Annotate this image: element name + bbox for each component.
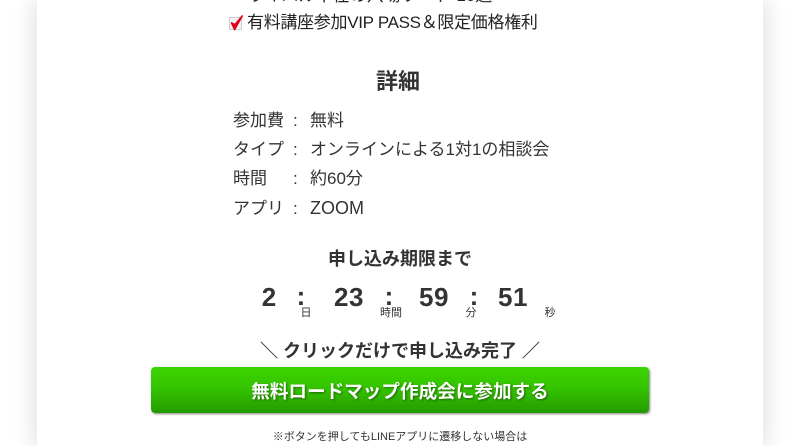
- countdown timer: 分: [466, 307, 476, 319]
- row: type: :: [293, 140, 298, 159]
- countdown timer: :: [385, 281, 393, 311]
- row: type: タイプ: [233, 140, 284, 159]
- button: join free roadmap session: [151, 367, 649, 413]
- row: fee: 無料: [310, 111, 344, 130]
- row: app: :: [293, 199, 298, 218]
- row: fee: :: [293, 111, 298, 130]
- details list: [233, 111, 549, 218]
- days: 2: [262, 282, 276, 312]
- row: time: 約60分: [310, 169, 363, 188]
- countdown timer: [262, 281, 556, 319]
- row: time: 時間: [233, 169, 267, 188]
- button: join free roadmap session: 無料ロードマップ作成会に参加する: [251, 381, 549, 402]
- hours: 23: [334, 282, 364, 312]
- heading: until deadline: 申し込み期限まで: [328, 249, 472, 269]
- countdown timer: :: [297, 281, 305, 311]
- row: time: :: [293, 169, 298, 188]
- text: VIP pass label: 有料講座参加VIP PASS＆限定価格権利: [247, 13, 538, 32]
- row: type: オンラインによる1対1の相談会: [310, 140, 549, 159]
- minutes: 59: [419, 282, 449, 312]
- row: fee: [233, 111, 344, 130]
- checkbox item: VIP pass: [229, 13, 538, 32]
- row: app: ZOOM: [310, 198, 364, 218]
- countdown timer: 日: [300, 307, 312, 319]
- countdown timer: 時間: [380, 307, 402, 319]
- row: app: [233, 198, 364, 218]
- note: LINE app fallback: ※ボタンを押してもLINEアプリに遷移しない場合は: [273, 431, 527, 443]
- icon: red check: [229, 15, 243, 30]
- row: app: アプリ: [233, 199, 284, 218]
- seconds: 51: [498, 282, 528, 312]
- row: fee: 参加費: [233, 111, 284, 130]
- countdown timer: 秒: [544, 307, 556, 319]
- row: time: [233, 169, 363, 188]
- callout: click to complete: ＼ クリックだけで申し込み完了 ／: [260, 341, 540, 361]
- countdown timer: :: [470, 281, 478, 311]
- heading: details: 詳細: [376, 69, 420, 94]
